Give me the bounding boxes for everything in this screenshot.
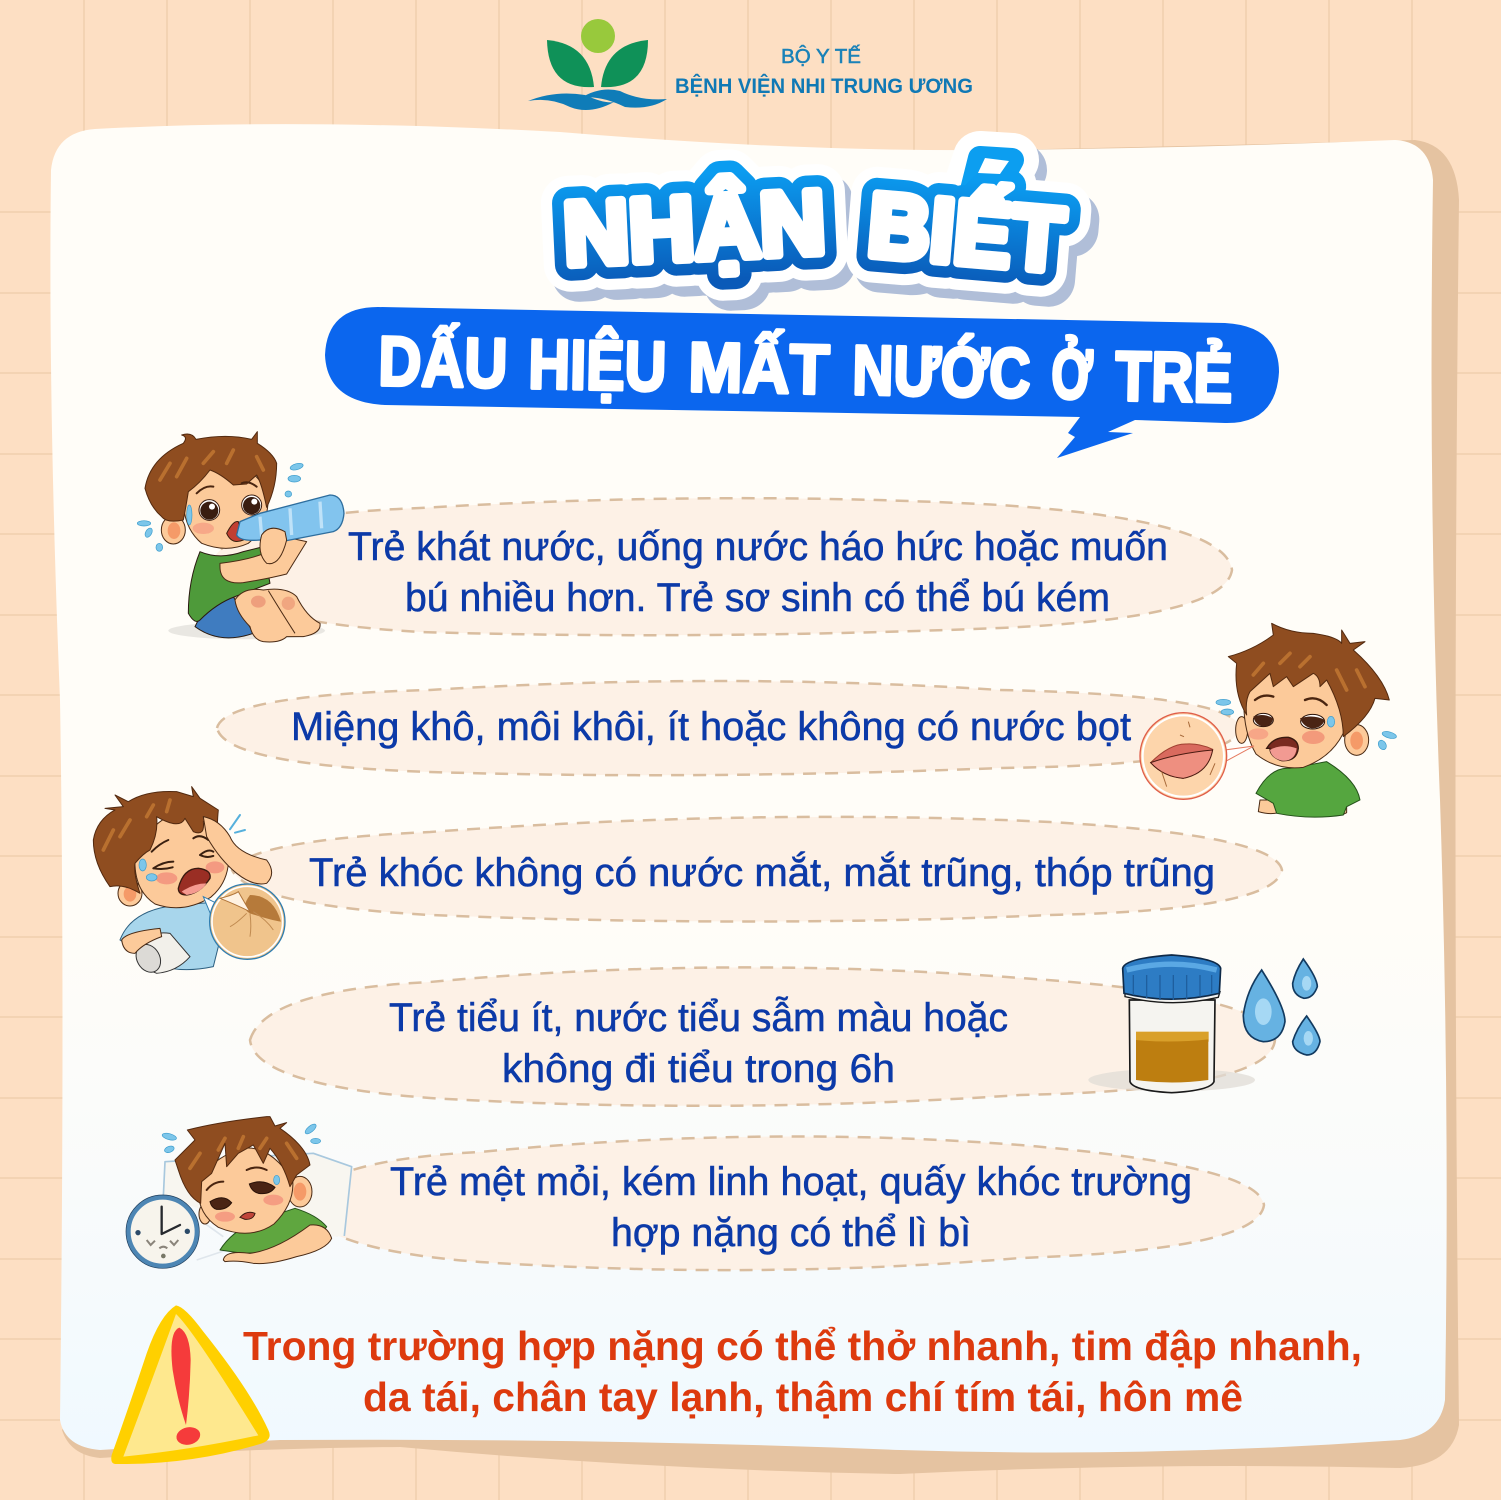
sign 2 bubble: Miệng khô, môi khôi, ít hoặc không có nước bọt [291, 705, 1131, 749]
title: NHẬN BIẾT: NHẬN [561, 171, 828, 285]
illustration: crying boy with sunken fontanelle [93, 787, 285, 977]
title: NHẬN BIẾT: NHẬN [561, 171, 828, 285]
sign 5 bubble: Trẻ mệt mỏi, kém linh hoạt, quấy khóc trường [390, 1160, 1192, 1204]
illustration: tired boy on pillow with clock [126, 1117, 352, 1268]
subtitle speech bubble: TRẺ [1115, 337, 1233, 417]
sign 4 bubble [250, 967, 1275, 1106]
title: NHẬN BIẾT: NHẬN [569, 181, 836, 295]
warning text: da tái, chân tay lạnh, thậm chí tím tái, hôn mê [363, 1374, 1243, 1420]
title: NHẬN BIẾT: BIẾT [872, 183, 1076, 301]
title: NHẬN BIẾT: BIẾT [864, 173, 1068, 291]
title: NHẬN BIẾT [561, 158, 1076, 301]
sign 4 bubble: Trẻ tiểu ít, nước tiểu sẫm màu hoặc [389, 995, 1008, 1040]
sign 1 bubble: bú nhiều hơn. Trẻ sơ sinh có thể bú kém [405, 576, 1110, 620]
warning text: Trong trường hợp nặng có thể thở nhanh, tim đập nhanh, [243, 1323, 1362, 1369]
subtitle speech bubble: Ở [1051, 334, 1093, 414]
logo: Bệnh viện Nhi Trung ương: BỘ Y TẾ [781, 45, 861, 68]
sign 2 bubble [217, 681, 1240, 775]
subtitle speech bubble: HIỆU [528, 324, 667, 406]
title: NHẬN BIẾT: NHẬN [561, 171, 828, 285]
subtitle speech bubble [325, 307, 1279, 458]
sign 3 bubble [232, 817, 1282, 922]
sign 1 bubble [210, 498, 1232, 635]
illustration: urine sample jar and water drops [1088, 955, 1320, 1093]
sign 5 bubble: hợp nặng có thể lì bì [611, 1211, 971, 1255]
title: NHẬN BIẾT: BIẾT [864, 173, 1068, 291]
sign 4 bubble: không đi tiểu trong 6h [502, 1047, 895, 1091]
subtitle speech bubble: NƯỚC [852, 331, 1031, 412]
warning icon [111, 1305, 270, 1464]
sign 1 bubble: Trẻ khát nước, uống nước háo hức hoặc muốn [348, 525, 1168, 569]
title: NHẬN BIẾT: BIẾT [864, 173, 1068, 291]
illustration: boy drinking water [137, 432, 344, 642]
logo: Bệnh viện Nhi Trung ương [528, 19, 973, 110]
illustration: boy with dry mouth [1140, 623, 1397, 817]
warning text [243, 1323, 1362, 1420]
logo: Bệnh viện Nhi Trung ương: BỆNH VIỆN NHI TRUNG ƯƠNG [675, 74, 973, 98]
subtitle speech bubble: DẤU [378, 322, 508, 402]
sign 5 bubble [300, 1136, 1264, 1270]
subtitle speech bubble: MẤT [688, 328, 830, 409]
sign 3 bubble: Trẻ khóc không có nước mắt, mắt trũng, thóp trũng [309, 850, 1215, 895]
